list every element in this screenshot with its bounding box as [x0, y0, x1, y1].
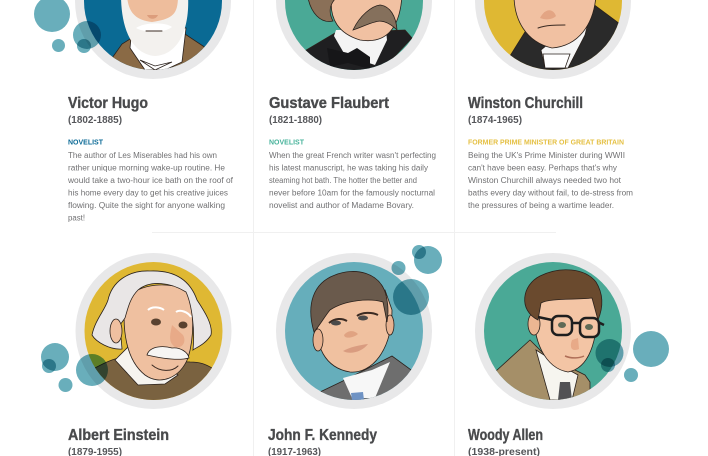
description: would take a two-hour ice bath on the roof of [67, 176, 234, 185]
description: The author of Les Miserables had his own [68, 151, 217, 160]
name: John F. Kennedy [268, 427, 377, 444]
occupation: NOVELIST [269, 140, 305, 146]
description: can't have been easy. Perhaps that's why [468, 164, 617, 172]
description: baths every day without fail, to de-stress from [468, 188, 633, 198]
description: Being the UK's Prime Minister during WWII [468, 151, 625, 160]
bubbles: John F. Kennedy [392, 245, 442, 315]
bubbles: Albert Einstein [41, 343, 108, 392]
description [468, 151, 633, 210]
description: never before 10am for the famously nocturnal [269, 188, 435, 198]
portrait: Victor Hugo [75, 0, 231, 79]
dates: (1802-1885) [68, 115, 122, 126]
panel: Woody Allen [468, 253, 669, 456]
dates: (1821-1880) [269, 115, 322, 126]
description: his home every day to get his creative juices [68, 188, 228, 198]
occupation: FORMER PRIME MINISTER OF GREAT BRITAIN [468, 140, 624, 146]
description: past! [68, 214, 85, 222]
panel: Victor Hugo [34, 0, 234, 222]
description [67, 151, 234, 222]
panel: John F. Kennedy [268, 245, 442, 456]
panel: Winston Churchill [468, 0, 633, 210]
portrait: John F. Kennedy [276, 253, 432, 409]
panel: Albert Einstein [41, 253, 232, 456]
description: novelist and author of Madame Bovary. [269, 201, 414, 210]
dates: (1874-1965) [468, 115, 522, 126]
name: Victor Hugo [68, 95, 148, 112]
description: steaming hot bath. The hotter the better and [269, 176, 417, 185]
description: his latest manuscript, he was taking his daily [269, 164, 428, 172]
description: When the great French writer wasn't perfecting [269, 151, 436, 160]
portrait: Winston Churchill [475, 0, 631, 79]
description [269, 151, 436, 210]
portrait: Woody Allen [475, 253, 631, 409]
name: Gustave Flaubert [269, 95, 390, 112]
description: rather unique morning wake-up routine. He [68, 164, 226, 172]
name: Winston Churchill [468, 95, 583, 112]
bubbles: Victor Hugo [34, 0, 101, 53]
bubbles: Woody Allen [596, 331, 669, 382]
name: Albert Einstein [68, 427, 169, 444]
description: the pressures of being a wartime leader. [468, 201, 614, 210]
name: Woody Allen [468, 427, 543, 444]
portrait: Gustave Flaubert [276, 0, 432, 79]
portrait: Albert Einstein [76, 253, 232, 409]
description: Winston Churchill always needed two hot [468, 176, 622, 185]
description: flowing. Quite the sight for anyone walking [68, 201, 225, 210]
panel: Gustave Flaubert [269, 0, 436, 210]
occupation: NOVELIST [68, 140, 104, 146]
